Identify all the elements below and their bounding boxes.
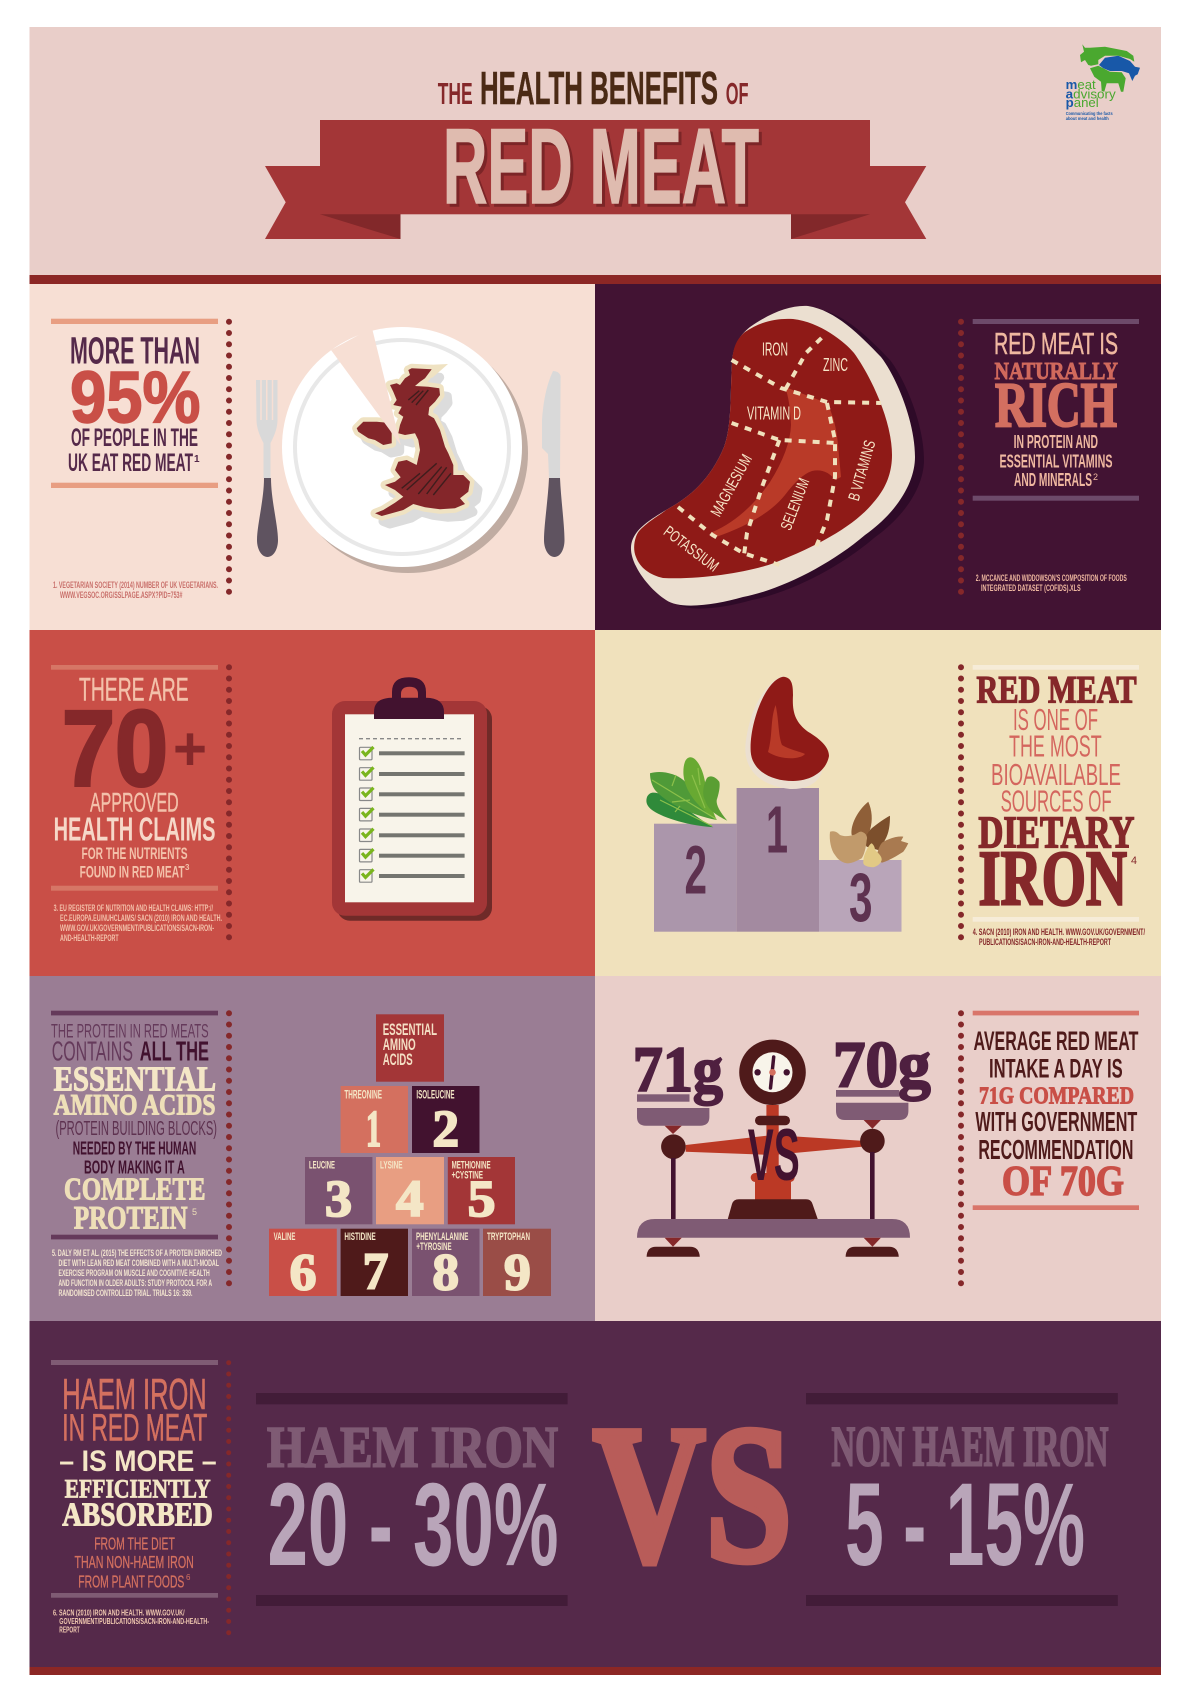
text block: haem iron absorption: – IS MORE – <box>59 1445 217 1478</box>
footnote 2 <box>976 573 1127 593</box>
icon: balance scale 71g vs 70g: 70g <box>833 1029 931 1102</box>
text block: dietary iron: IS ONE OF <box>1013 702 1098 737</box>
block 7: histidine <box>341 1229 408 1300</box>
block 5: methionine and cystine: +CYSTINE <box>452 1169 483 1181</box>
labels: nutrients: VITAMIN D <box>747 404 801 424</box>
comparison: haem iron 20-30% <box>256 1393 568 1606</box>
text block: naturally rich: AND MINERALS <box>1014 470 1092 490</box>
block: essential amino acids: AMINO <box>383 1036 416 1054</box>
block 3: leucine: 3 <box>325 1171 352 1228</box>
text block: complete protein: CONTAINS <box>52 1036 133 1067</box>
block: essential amino acids: ACIDS <box>383 1051 413 1069</box>
icon: knife <box>542 371 564 557</box>
panel: naturally rich <box>595 284 1161 630</box>
panel: average intake vs recommendation <box>595 976 1161 1321</box>
footnote 3: EC.EUROPA.EU/NUHCLAIMS/ SACN (2010) IRON AND HEALTH. <box>60 913 222 923</box>
icon: balance scale 71g vs 70g <box>633 1029 931 1257</box>
labels: nutrients: ZINC <box>823 355 848 375</box>
labels: nutrients: B VITAMINS <box>846 439 879 503</box>
icon: fork <box>256 380 278 557</box>
text block: 70+ health claims: HEALTH CLAIMS <box>54 812 215 849</box>
text block: more than 95%: UK EAT RED MEAT <box>68 449 193 477</box>
icon: nuts <box>830 802 908 867</box>
text block: complete protein: (PROTEIN BUILDING BLOCKS) <box>56 1117 217 1140</box>
text block: haem iron absorption: 6 <box>186 1573 191 1582</box>
block 4: lysine: LYSINE <box>380 1159 403 1171</box>
panel: approved health claims <box>30 630 595 976</box>
text block: dietary iron: IRON <box>978 834 1127 921</box>
footnote 1: 1. VEGETARIAN SOCIETY (2014) NUMBER OF UK VEGETARIANS. <box>53 580 218 590</box>
logo: meat advisory panel: about meat and health <box>1066 116 1109 121</box>
footnote 5 <box>52 1248 222 1298</box>
text block: complete protein <box>51 1011 218 1239</box>
text block: dietary iron: 4 <box>1131 855 1137 867</box>
block 6: valine: 6 <box>290 1244 316 1302</box>
logo: meat advisory panel: panel <box>1066 95 1099 110</box>
block 5: methionine and cystine: METHIONINE <box>452 1159 491 1171</box>
block 8: phenylalanine and tyrosine <box>412 1229 480 1302</box>
labels: nutrients: POTASSIUM <box>660 523 721 575</box>
icon: podium <box>654 788 902 936</box>
footnote 5: EXERCISE PROGRAM ON MUSCLE AND COGNITIVE HEALTH <box>58 1268 210 1278</box>
text block: dietary iron <box>973 665 1139 922</box>
text block: complete protein: BODY MAKING IT A <box>84 1156 185 1177</box>
title line: the health benefits of: HEALTH BENEFITS <box>480 62 718 114</box>
labels: nutrients <box>660 340 879 575</box>
text block: more than 95%: MORE THAN <box>70 330 200 372</box>
comparison: haem iron 20-30%: HAEM IRON <box>267 1414 558 1479</box>
text block: 70+ health claims: THERE ARE <box>79 672 189 708</box>
text block: complete protein: 5 <box>192 1207 197 1217</box>
text block: more than 95%: 1 <box>194 454 200 465</box>
title line: the health benefits of: OF <box>726 78 748 111</box>
footnote 6: GOVERNMENT/PUBLICATIONS/SACN-IRON-AND-HEALTH- <box>59 1616 209 1626</box>
block 5: methionine and cystine <box>448 1157 515 1228</box>
text block: average intake: OF 70G <box>1002 1158 1124 1205</box>
ribbon banner <box>265 120 926 239</box>
footnote 5: RANDOMISED CONTROLLED TRIAL. TRIALS 16: 339. <box>58 1288 192 1298</box>
icon: podium: 2 <box>684 831 707 908</box>
text block: complete protein: ESSENTIAL <box>54 1060 216 1099</box>
comparison: haem iron 20-30%: 20 - 30% <box>268 1459 558 1591</box>
footnote 6: 6. SACN (2010) IRON AND HEALTH. WWW.GOV.UK/ <box>53 1608 185 1618</box>
title line: the health benefits of <box>438 62 748 114</box>
block 9: tryptophan <box>483 1229 551 1302</box>
footnote 5: 5. DALY RM ET AL. (2015) THE EFFECTS OF A PROTEIN ENRICHED <box>52 1248 222 1258</box>
icon: balance scale 71g vs 70g: 71g <box>633 1033 723 1105</box>
text block: complete protein: PROTEIN <box>74 1200 188 1236</box>
block 4: lysine <box>376 1157 444 1228</box>
block 7: histidine: HISTIDINE <box>344 1231 376 1243</box>
block 8: phenylalanine and tyrosine: +TYROSINE <box>416 1241 452 1253</box>
text block: dietary iron: RED MEAT <box>976 669 1137 711</box>
text block: 70+ health claims: APPROVED <box>90 788 179 818</box>
footnote 3: 3. EU REGISTER OF NUTRITION AND HEALTH CLAIMS: HTTP:// <box>54 903 213 913</box>
panel: bioavailable iron <box>595 630 1161 976</box>
text block: haem iron absorption: ABSORBED <box>62 1497 213 1534</box>
block 8: phenylalanine and tyrosine: 8 <box>432 1244 459 1302</box>
logo: meat advisory panel <box>1066 44 1140 121</box>
block 2: isoleucine: 2 <box>432 1101 459 1158</box>
text block: naturally rich: RICH <box>995 370 1117 440</box>
text block: naturally rich: IN PROTEIN AND <box>1014 432 1098 452</box>
text block: complete protein: AMINO ACIDS <box>54 1089 215 1121</box>
text block: 70+ health claims: FOUND IN RED MEAT <box>80 862 185 881</box>
logo: meat advisory panel: Communicating the facts <box>1066 111 1113 116</box>
text block: haem iron absorption: HAEM IRON <box>62 1370 207 1419</box>
block 5: methionine and cystine: 5 <box>468 1171 496 1228</box>
footnote 2: INTEGRATED DATASET (COFIDS).XLS <box>981 583 1081 593</box>
icon: spinach leaves <box>646 757 727 827</box>
block 1: threonine: THREONINE <box>344 1089 382 1101</box>
footnote 1: WWW.VEGSOC.ORG/SSLPAGE.ASPX?PID=753# <box>60 590 182 600</box>
footnote 3: AND-HEALTH-REPORT <box>60 933 119 943</box>
block 2: isoleucine <box>412 1086 480 1158</box>
footnote 3 <box>54 903 222 943</box>
text block: complete protein: ALL THE <box>140 1036 209 1067</box>
text block: naturally rich: ESSENTIAL VITAMINS <box>1000 451 1112 471</box>
text block: average intake: 71G COMPARED <box>979 1082 1134 1109</box>
block 3: leucine: LEUCINE <box>309 1159 335 1171</box>
text block: haem iron absorption <box>51 1360 218 1598</box>
icon: balance scale 71g vs 70g: VS <box>748 1115 800 1196</box>
text block: haem iron absorption: IN RED MEAT <box>62 1408 207 1450</box>
footnote 3: WWW.GOV.UK/GOVERNMENT/PUBLICATIONS/SACN-IRON- <box>60 923 214 933</box>
panel: essential amino acids <box>30 976 595 1321</box>
text block: haem iron absorption: FROM THE DIET <box>94 1533 175 1553</box>
icon: steak with nutrient cuts <box>631 306 924 609</box>
text block: naturally rich: NATURALLY <box>994 358 1118 385</box>
text block: complete protein: COMPLETE <box>64 1171 206 1206</box>
text block: 70+ health claims: FOR THE NUTRIENTS <box>82 844 188 863</box>
map: United Kingdom <box>357 364 478 524</box>
text block: 70+ health claims: 70 <box>62 688 168 809</box>
text block: naturally rich <box>973 319 1139 501</box>
chart: amino acid pyramid <box>269 1014 551 1302</box>
icon: plate with map of the UK <box>282 327 528 573</box>
text block: 70+ health claims: 3 <box>185 863 190 872</box>
labels: nutrients: SELENIUM <box>778 476 813 533</box>
footnote 6 <box>53 1608 209 1635</box>
block 4: lysine: 4 <box>396 1170 424 1228</box>
block: essential amino acids: ESSENTIAL <box>383 1021 437 1039</box>
text block: more than 95%: 95% <box>70 357 200 438</box>
text block: complete protein: NEEDED BY THE HUMAN <box>73 1137 196 1158</box>
block 2: isoleucine: ISOLEUCINE <box>416 1089 455 1101</box>
text block: haem iron absorption: FROM PLANT FOODS <box>78 1571 184 1591</box>
block: essential amino acids <box>376 1014 444 1082</box>
icon: podium: 1 <box>766 792 788 867</box>
panel: 95 percent eat red meat <box>30 284 595 630</box>
text block: complete protein: THE PROTEIN IN RED MEATS <box>51 1020 209 1042</box>
text block: haem iron absorption: EFFICIENTLY <box>65 1474 211 1504</box>
footnote 1 <box>53 580 218 600</box>
panel: header banner <box>30 27 1161 284</box>
panel: haem iron vs non-haem iron <box>30 1321 1161 1675</box>
icon: small steak <box>745 676 829 789</box>
labels: nutrients: IRON <box>762 340 788 360</box>
text block: average intake <box>973 1011 1139 1210</box>
text block: more than 95%: OF PEOPLE IN THE <box>71 424 198 452</box>
text block: haem iron absorption: THAN NON-HAEM IRON <box>74 1552 194 1572</box>
footnote 5: AND FUNCTION IN OLDER ADULTS: STUDY PROTOCOL FOR A <box>58 1278 212 1288</box>
comparison: non haem iron 5-15% <box>806 1393 1118 1606</box>
block 9: tryptophan: TRYPTOPHAN <box>487 1231 530 1243</box>
block 1: threonine <box>341 1086 408 1158</box>
footnote 4 <box>973 927 1145 947</box>
text block: more than 95% <box>51 319 218 488</box>
block 6: valine: VALINE <box>274 1231 295 1243</box>
text block: naturally rich: 2 <box>1093 472 1098 482</box>
block 7: histidine: 7 <box>363 1244 388 1300</box>
text block: naturally rich: RED MEAT IS <box>994 326 1118 361</box>
icon: clipboard checklist <box>332 677 492 921</box>
title line: the health benefits of: THE <box>438 78 473 111</box>
text block: 70+ health claims <box>51 665 218 891</box>
title: red meat: RED MEAT <box>443 106 759 226</box>
logo: meat advisory panel: advisory <box>1066 86 1116 102</box>
block 9: tryptophan: 9 <box>504 1244 531 1302</box>
block 8: phenylalanine and tyrosine: PHENYLALANINE <box>416 1231 468 1243</box>
footnote 5: DIET WITH LEAN RED MEAT COMBINED WITH A MULTI-MODAL <box>58 1258 219 1268</box>
heading: vs: VS <box>593 1386 792 1603</box>
block 1: threonine: 1 <box>366 1101 381 1158</box>
icon: podium: 3 <box>849 859 872 936</box>
text block: 70+ health claims: + <box>173 715 207 784</box>
block 6: valine <box>269 1229 337 1302</box>
labels: nutrients: MAGNESIUM <box>708 452 756 520</box>
block 3: leucine <box>305 1157 372 1228</box>
text block: dietary iron: THE MOST <box>1009 729 1102 764</box>
logo: meat advisory panel: meat <box>1066 77 1096 92</box>
text block: dietary iron: DIETARY <box>978 808 1134 858</box>
footnote 6: REPORT <box>59 1625 80 1635</box>
